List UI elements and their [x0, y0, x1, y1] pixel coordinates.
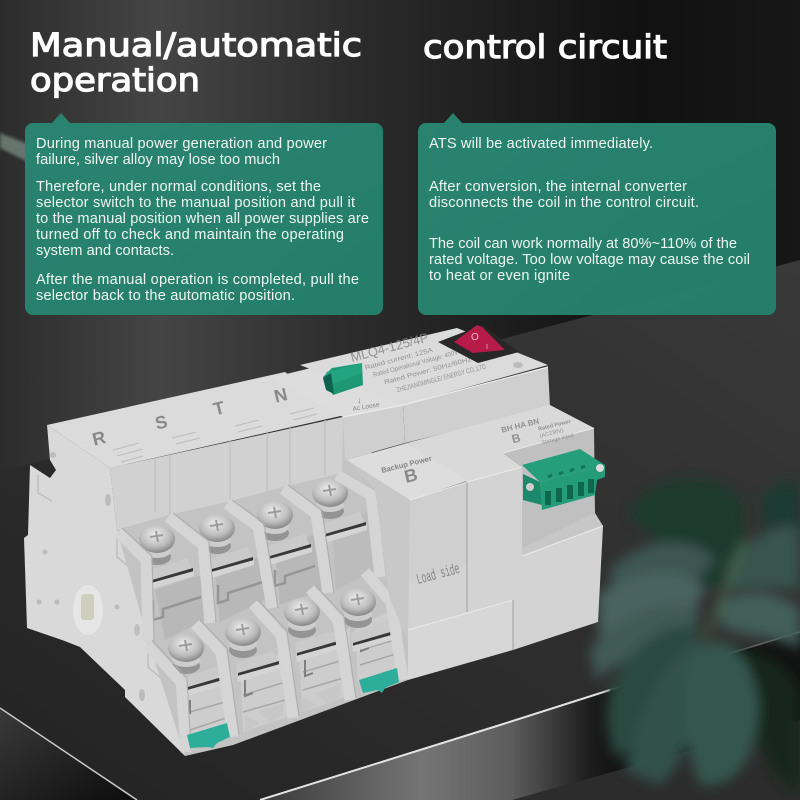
panel: manual operation — [25, 113, 383, 315]
lower divider fins — [147, 572, 403, 752]
product: automatic transfer switch — [24, 317, 605, 756]
panel: manual operation: Therefore, under normal conditions, set the — [36, 179, 321, 195]
backup power label: Backup Power — [380, 454, 433, 475]
connector label text — [500, 409, 576, 455]
title: manual/automatic operation: Manual/automatic — [30, 26, 362, 64]
connector label text: B — [510, 431, 522, 446]
title: manual/automatic operation: operation — [30, 61, 200, 99]
panel: manual operation: turned off to check and maintain the operating — [36, 227, 344, 243]
connector label text: BH HA BN — [500, 416, 540, 435]
top face: phase labels section — [47, 372, 345, 468]
panel: manual operation: selector back to the automatic position. — [36, 288, 295, 304]
rating section with rocker switch — [300, 317, 550, 443]
connector label text: Rated Power — [538, 419, 572, 433]
rating label text: ZHEJIANGMINGLEI ENERGY CO.,LTD — [396, 364, 487, 394]
selector mark: Ac Loose — [352, 401, 380, 413]
side face of the switch body — [24, 425, 190, 756]
panel: control circuit: rated voltage. Too low voltage may cause the coil — [429, 252, 750, 268]
green selector switch — [323, 363, 363, 395]
green terminal connector — [522, 449, 605, 510]
rating label text — [349, 317, 487, 404]
panel: manual operation: During manual power generation and power — [36, 136, 327, 152]
panel: control circuit: to heat or even ignite — [429, 268, 570, 284]
panel: control circuit — [418, 113, 776, 315]
phase letter N: N — [272, 384, 290, 407]
rocker switch: O — [471, 332, 479, 343]
mounting tabs — [245, 685, 340, 732]
panel: control circuit: disconnects the coil in the control circuit. — [429, 195, 699, 211]
rating label text: Rated Operational Voltage: 400V — [372, 349, 460, 379]
panel: manual operation: failure, silver alloy may lose too much — [36, 152, 280, 168]
blurred cable top left — [0, 133, 28, 162]
panel: manual operation: After the manual operation is completed, pull the — [36, 272, 359, 288]
connector label text: (AC230V) — [539, 428, 564, 440]
upper divider fins — [118, 475, 380, 642]
title: control circuit: control circuit — [423, 28, 667, 66]
panel: control circuit: The coil can work normally at 80%~110% of the — [429, 236, 737, 252]
rocker switch — [438, 325, 519, 363]
blurred monstera plant — [590, 479, 800, 790]
teal clip right — [359, 668, 399, 693]
phase letter T: T — [211, 397, 227, 419]
panel: manual operation: selector switch to the manual position and pull it — [36, 195, 355, 211]
rocker switch: I — [486, 344, 488, 351]
rating label text: Rated current: 125A — [364, 347, 434, 372]
phase letter R: R — [90, 427, 108, 450]
front body of the terminals — [110, 417, 410, 756]
rating label text: Rated Power: 50Hz/60Hz — [384, 356, 472, 386]
load side label: Load side — [415, 561, 462, 589]
selector section — [270, 345, 405, 460]
lower terminal screws — [168, 588, 395, 698]
panel: control circuit: After conversion, the internal converter — [429, 179, 687, 195]
panel: manual operation: to the manual position when all power supplies are — [36, 211, 369, 227]
title: manual/automatic operation — [30, 26, 362, 99]
selector arrow: ↓ — [357, 395, 362, 405]
rating label text: MLQ4-125/4P — [349, 330, 430, 365]
connector label text: Storage input — [541, 432, 575, 446]
B mark: B — [402, 464, 420, 487]
upper terminal screws — [139, 479, 367, 589]
teal clip left — [187, 723, 230, 748]
panel: manual operation: system and contacts. — [36, 243, 174, 259]
phase letter S: S — [153, 411, 170, 434]
load side module — [347, 405, 603, 680]
panel: control circuit: ATS will be activated immediately. — [429, 136, 653, 152]
